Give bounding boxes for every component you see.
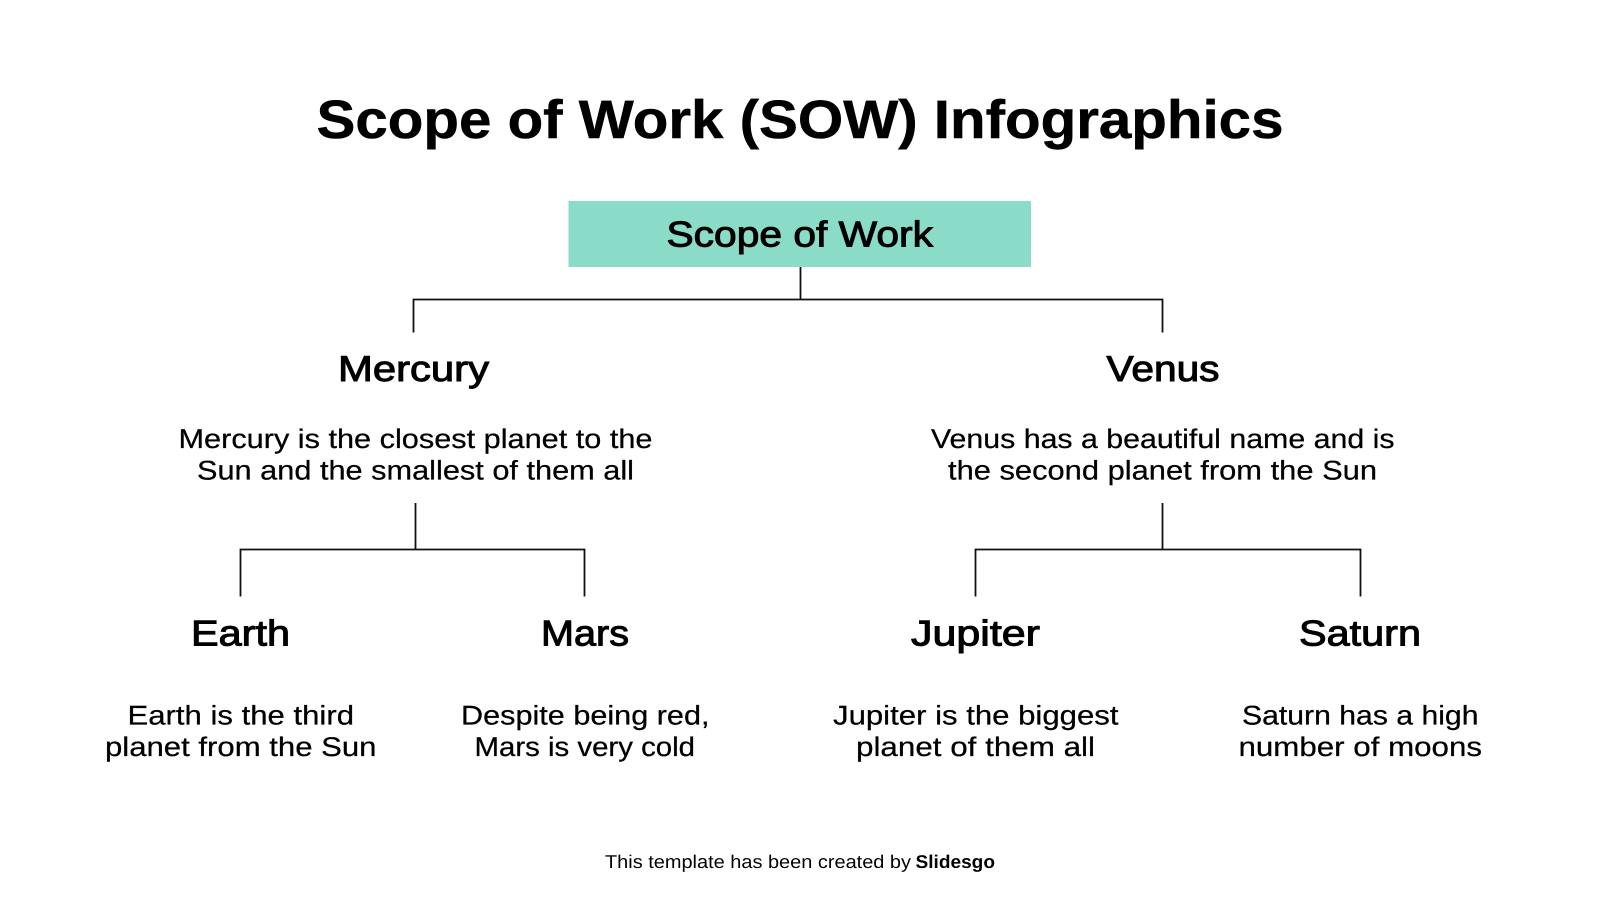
- panel: Earth: planet from the Sun: [105, 732, 376, 762]
- panel: Jupiter: [833, 612, 1119, 762]
- panel: Venus: the second planet from the Sun: [948, 456, 1377, 486]
- panel: Mercury: Mercury is the closest planet to the: [178, 424, 652, 454]
- panel: Mars: [461, 612, 710, 762]
- connector: Venus to Jupiter and Saturn: [976, 503, 1360, 596]
- footer credit: Slidesgo: [916, 851, 995, 872]
- panel: Venus: Venus: [1106, 348, 1220, 389]
- panel: Mars: Mars: [541, 612, 629, 654]
- panel: Jupiter: planet of them all: [856, 732, 1095, 762]
- root box: Scope of Work: [568, 201, 1031, 267]
- panel: Mercury: [178, 348, 652, 486]
- panel: Saturn: [1238, 612, 1482, 762]
- panel: Venus: [931, 348, 1394, 486]
- title: Scope of Work (SOW) Infographics: [316, 90, 1284, 150]
- connector: Mercury to Earth and Mars: [240, 503, 584, 596]
- connector: root to Mercury and Venus: [414, 267, 1162, 332]
- panel: Saturn: Saturn has a high: [1242, 700, 1478, 730]
- panel: Mercury: Sun and the smallest of them all: [197, 456, 634, 486]
- panel: Venus: Venus has a beautiful name and is: [931, 424, 1394, 454]
- panel: Jupiter: Jupiter is the biggest: [833, 700, 1119, 730]
- panel: Saturn: number of moons: [1238, 732, 1482, 762]
- panel: Mars: Mars is very cold: [474, 732, 695, 762]
- panel: Jupiter: Jupiter: [911, 612, 1040, 654]
- panel: Mars: Despite being red,: [461, 700, 710, 730]
- footer credit: This template has been created by: [605, 851, 912, 872]
- panel: Mercury: Mercury: [338, 348, 489, 389]
- panel: Earth: [105, 612, 376, 762]
- panel: Earth: Earth: [191, 612, 290, 654]
- root box: Scope of Work: Scope of Work: [666, 214, 934, 254]
- panel: Saturn: Saturn: [1299, 612, 1421, 654]
- panel: Earth: Earth is the third: [128, 700, 354, 730]
